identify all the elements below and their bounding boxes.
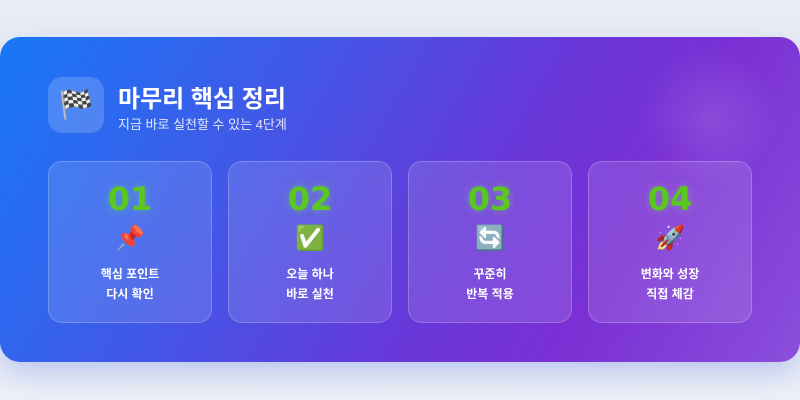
card: step 04 — [588, 161, 752, 323]
card: step 02: 02 — [288, 180, 332, 218]
card: step 02 — [228, 161, 392, 323]
card: step 03: 꾸준히 — [473, 267, 507, 281]
icon: checkered flag: 🏁 — [59, 89, 93, 120]
card: step 03: 03 — [468, 180, 512, 218]
icon: checkered flag — [48, 77, 104, 133]
card: step 03: 🔄 — [475, 225, 505, 252]
card: step 04: 🚀 — [655, 225, 685, 252]
card: step 03: 반복 적용 — [466, 287, 514, 301]
card: step 01: 01 — [108, 180, 152, 218]
card: step 01: 핵심 포인트 — [101, 267, 159, 281]
card: step 02: 오늘 하나 — [286, 267, 334, 281]
card: step 01: 다시 확인 — [106, 287, 154, 301]
card: step 02: 바로 실천 — [286, 287, 334, 301]
subtitle: 지금 바로 실천할 수 있는 4단계 — [118, 117, 287, 132]
card: step 04: 변화와 성장 — [641, 267, 699, 281]
card: step 04: 04 — [648, 180, 692, 218]
card: step 02: ✅ — [295, 225, 325, 252]
card: step 04: 직접 체감 — [646, 287, 694, 301]
card: step 01: 📌 — [115, 225, 145, 252]
title: 마무리 핵심 정리 — [118, 86, 286, 113]
card: step 01 — [48, 161, 212, 323]
card: step 03 — [408, 161, 572, 323]
